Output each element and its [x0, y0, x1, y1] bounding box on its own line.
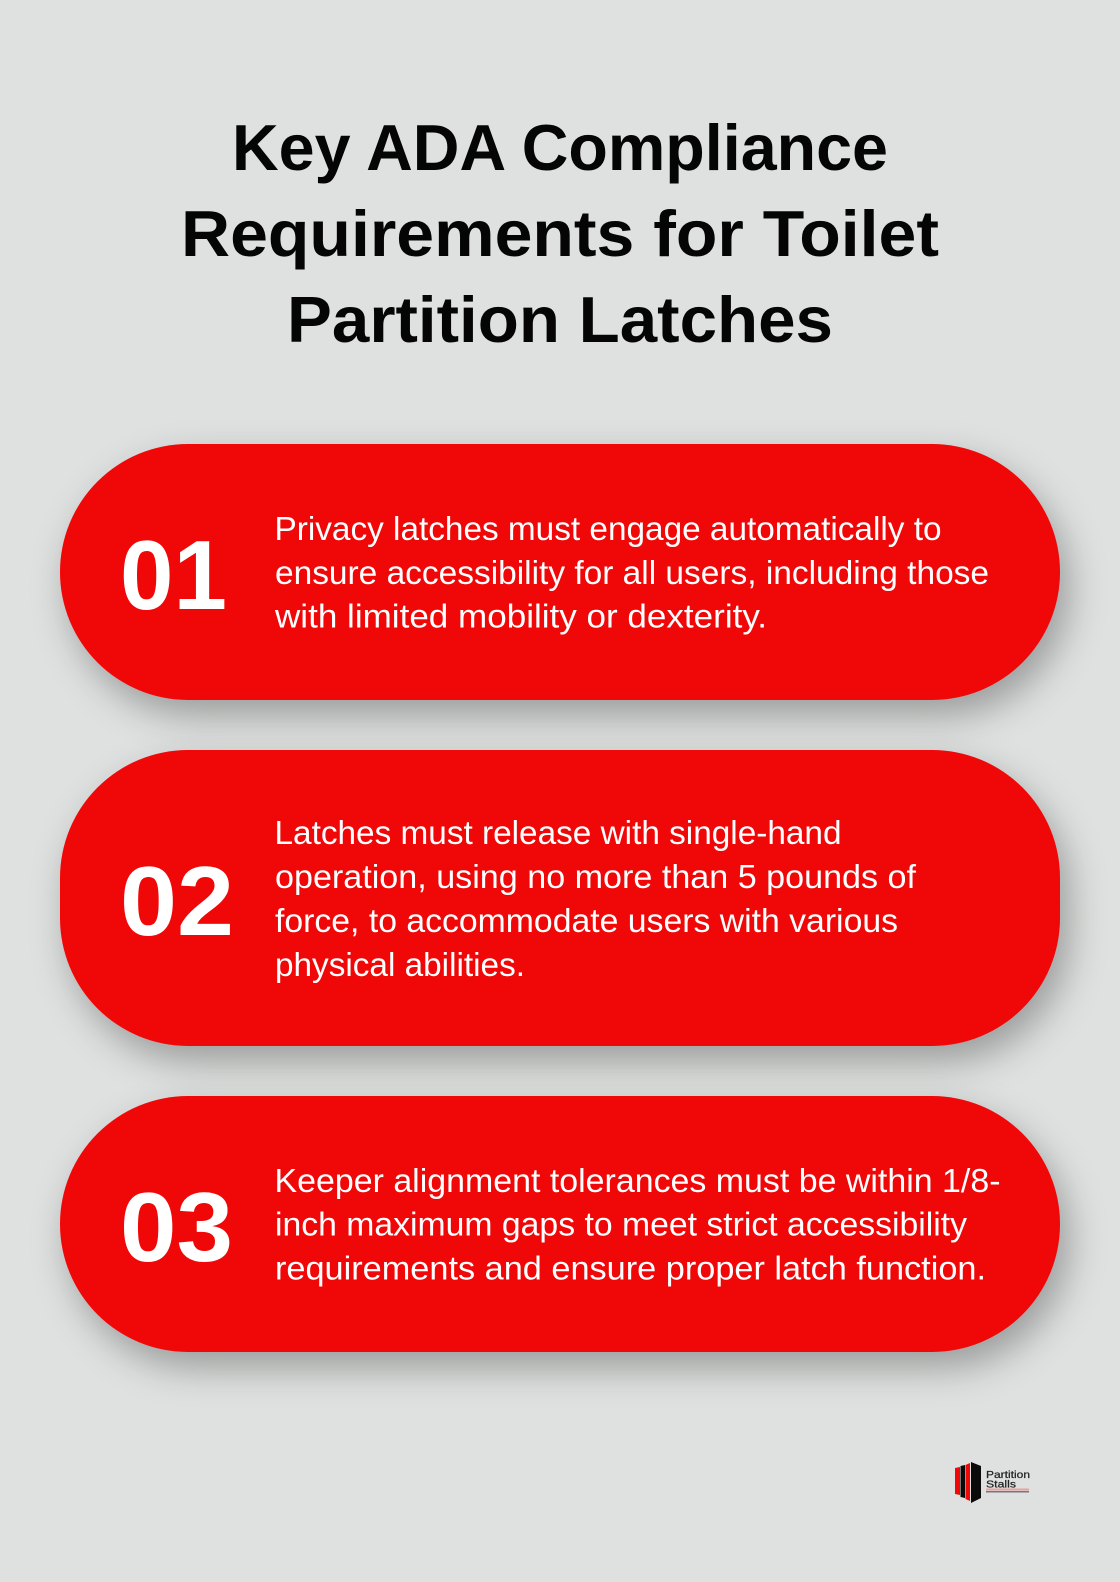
- text block 01: [274, 510, 989, 634]
- number 02: 02: [120, 846, 234, 956]
- panel: requirement 02: [60, 750, 1060, 1046]
- panel: requirement 03: [60, 1096, 1060, 1352]
- wordmark: Stalls: [986, 1478, 1016, 1490]
- text block 02: Latches must release with single-hand: [274, 814, 842, 851]
- text block 02: [274, 814, 917, 983]
- text block 03: inch maximum gaps to meet strict accessibility: [275, 1206, 968, 1242]
- panel: requirement 01: [60, 444, 1060, 700]
- pill background 03: [60, 1096, 1060, 1352]
- text block 01: ensure accessibility for all users, including those: [275, 554, 989, 591]
- title: [181, 111, 939, 356]
- text block 03: requirements and ensure proper latch function.: [275, 1250, 986, 1286]
- logo: Partition Stalls: [955, 1462, 1030, 1503]
- pill background 02: [60, 750, 1060, 1046]
- wordmark: [986, 1469, 1030, 1492]
- text block 01: Privacy latches must engage automatically to: [274, 510, 941, 547]
- text block 02: force, to accommodate users with various: [275, 902, 898, 939]
- title: Partition Latches: [287, 283, 833, 356]
- title: Key ADA Compliance: [232, 111, 888, 184]
- icon: partition panels: [955, 1462, 981, 1503]
- text block 02: physical abilities.: [275, 946, 525, 983]
- title: Requirements for Toilet: [181, 197, 939, 270]
- text block 03: Keeper alignment tolerances must be within 1/8-: [274, 1162, 1000, 1199]
- text block 02: operation, using no more than 5 pounds of: [275, 858, 917, 895]
- wordmark: Partition: [986, 1469, 1030, 1481]
- number 03: 03: [120, 1172, 233, 1282]
- pill background 01: [60, 444, 1060, 700]
- text block 03: [274, 1162, 1000, 1286]
- number 01: 01: [120, 520, 227, 630]
- text block 01: with limited mobility or dexterity.: [274, 598, 767, 634]
